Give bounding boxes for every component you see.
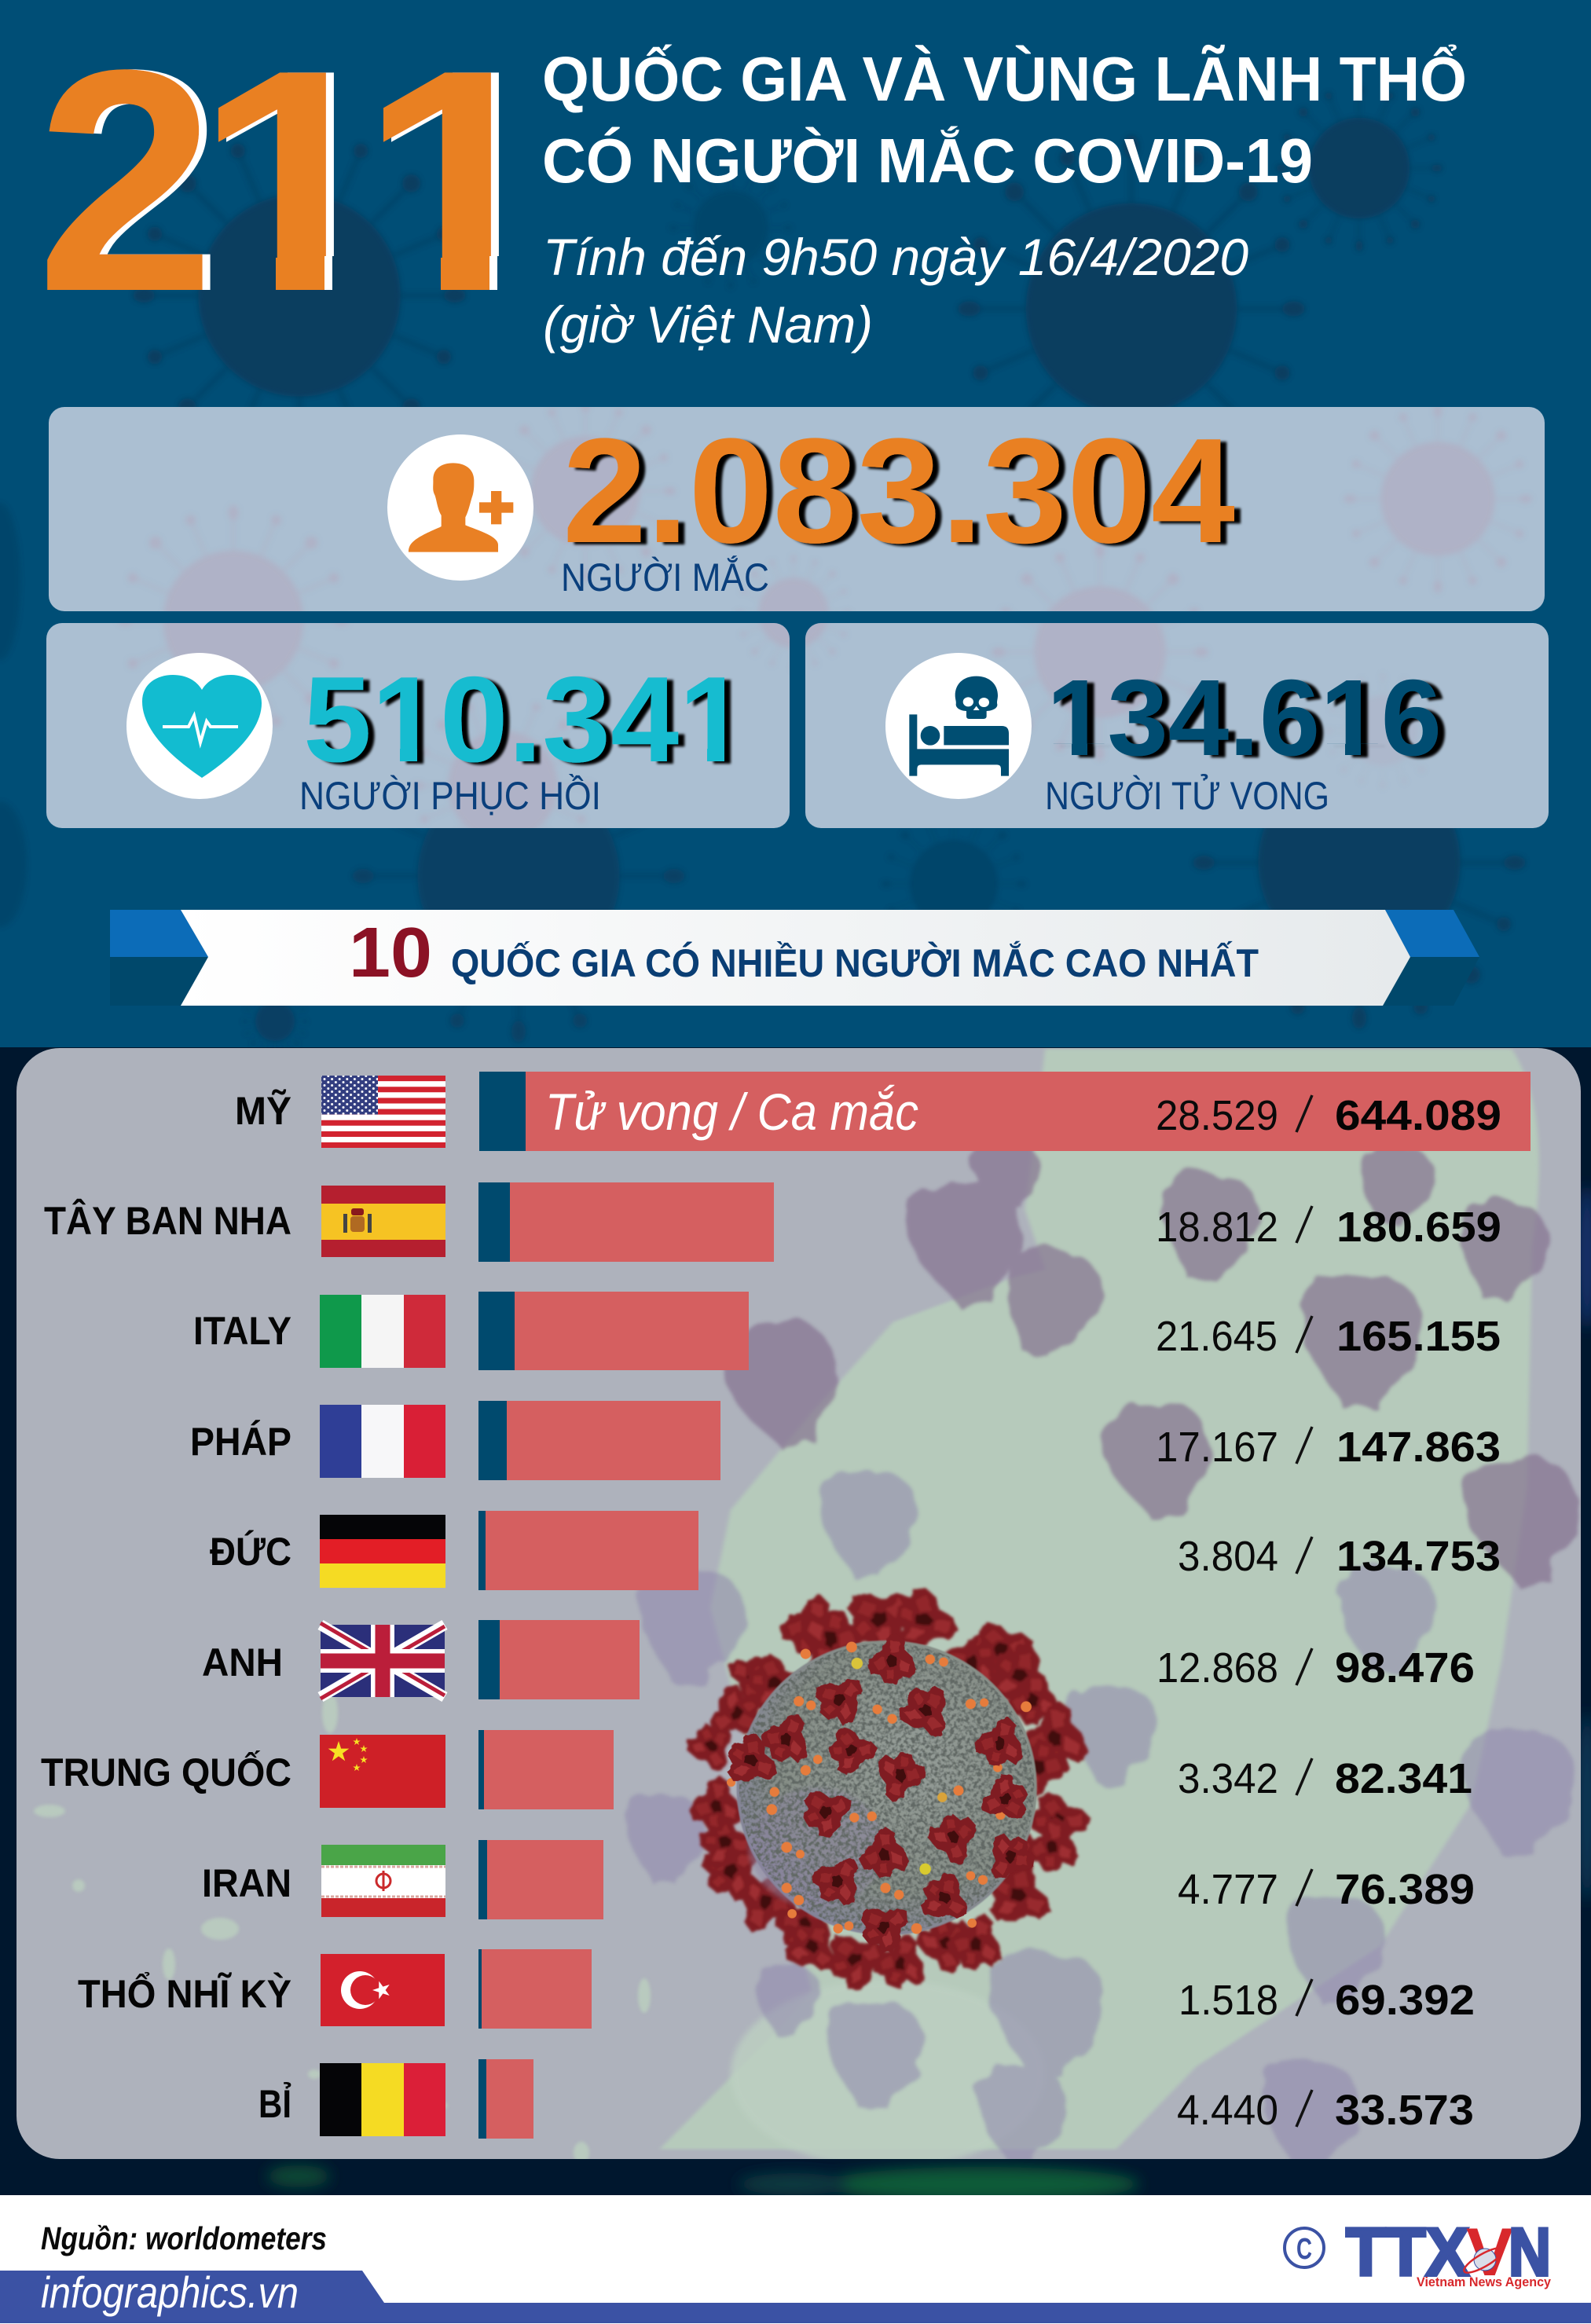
flag: Spain xyxy=(321,1186,445,1257)
row 10: Bỉ: 33.573 xyxy=(1335,2087,1474,2134)
row 5: Đức: 3.804 xyxy=(1178,1533,1278,1580)
section banner: 10 xyxy=(349,914,432,992)
row 3: Italy: ITALY xyxy=(193,1309,291,1353)
row 2: Tây Ban Nha: TÂY BAN NHA xyxy=(44,1199,291,1243)
subtitle: date: (giờ Việt Nam) xyxy=(543,295,873,354)
website: infographics.vn xyxy=(41,2267,299,2317)
icon: person plus xyxy=(387,434,533,581)
logo: copyright mark xyxy=(1285,2228,1324,2267)
row 4: Pháp: 147.863 xyxy=(1336,1424,1501,1471)
icon: heart xyxy=(126,653,273,799)
flag: USA xyxy=(321,1076,445,1148)
big number 211: 1 xyxy=(359,5,557,357)
row 3: Italy xyxy=(193,1292,1501,1370)
flag: Belgium xyxy=(320,2063,445,2136)
footer source text: Nguồn: worldometers xyxy=(41,2220,327,2256)
recovered label: NGƯỜI PHỤC HỒI xyxy=(299,774,601,818)
row 9: Thổ Nhĩ Kỳ xyxy=(78,1949,1475,2029)
big number 211: 2 xyxy=(36,5,215,357)
row 9: Thổ Nhĩ Kỳ: 1.518 xyxy=(1179,1977,1278,2024)
row 10: Bỉ xyxy=(258,2059,1474,2139)
flag: Turkey xyxy=(321,1954,445,2026)
background: dark lower section xyxy=(0,1047,1591,2196)
flag: Iran xyxy=(321,1845,445,1917)
panel: recovered xyxy=(46,623,790,828)
flag: China xyxy=(320,1735,445,1808)
panel: country chart xyxy=(16,1048,1591,2168)
section banner: QUỐC GIA CÓ NHIỀU NGƯỜI MẮC CAO NHẤT xyxy=(451,940,1259,985)
row 9: Thổ Nhĩ Kỳ: 69.392 xyxy=(1335,1977,1475,2024)
row 6: Anh: 12.868 xyxy=(1157,1644,1278,1692)
row 5: Đức xyxy=(210,1511,1501,1590)
logo: copyright mark: C xyxy=(1296,2233,1312,2266)
row 6: Anh xyxy=(202,1620,1475,1699)
row 7: Trung Quốc: 3.342 xyxy=(1178,1755,1278,1802)
row 10: Bỉ: 4.440 xyxy=(1177,2087,1278,2134)
row 1: Mỹ: MỸ xyxy=(235,1089,291,1133)
row 7: Trung Quốc: 82.341 xyxy=(1335,1755,1472,1802)
flag: Germany xyxy=(320,1515,445,1588)
row 1: Mỹ: 28.529 xyxy=(1156,1092,1278,1139)
title xyxy=(542,44,1467,196)
row 8: Iran: IRAN xyxy=(202,1861,291,1905)
logo: TTXVN: TTX xyxy=(1346,2215,1469,2290)
background: top blue section xyxy=(0,0,1591,1047)
row 1: Mỹ xyxy=(235,1072,1531,1151)
row 1: Mỹ: 644.089 xyxy=(1335,1092,1501,1139)
row 6: Anh: 98.476 xyxy=(1335,1644,1475,1692)
row 5: Đức: 134.753 xyxy=(1336,1533,1501,1580)
row 8: Iran: 4.777 xyxy=(1178,1866,1278,1913)
logo: TTXVN: N xyxy=(1509,2215,1551,2290)
row 2: Tây Ban Nha: 18.812 xyxy=(1156,1204,1278,1251)
row 4: Pháp: 17.167 xyxy=(1156,1424,1278,1471)
row 4: Pháp xyxy=(190,1401,1501,1480)
row 7: Trung Quốc: TRUNG QUỐC xyxy=(41,1750,291,1794)
deaths number: 134.616 xyxy=(1047,658,1442,779)
background: dark virus pattern top section xyxy=(0,85,1526,1054)
cases number: 2.083.304 xyxy=(563,408,1235,574)
background: pale virus pattern on cards xyxy=(121,407,1529,828)
row 7: Trung Quốc xyxy=(41,1730,1472,1809)
row 2: Tây Ban Nha: 180.659 xyxy=(1336,1204,1501,1251)
deaths label: NGƯỜI TỬ VONG xyxy=(1045,773,1329,818)
subtitle: date xyxy=(543,228,1248,354)
row 3: Italy: 165.155 xyxy=(1336,1313,1501,1360)
background: green virus glow at bottom strip xyxy=(267,1186,1591,2201)
flag: France xyxy=(320,1405,445,1478)
logo: TTXVN xyxy=(1346,2215,1552,2290)
row 8: Iran: 76.389 xyxy=(1335,1866,1475,1913)
row 9: Thổ Nhĩ Kỳ: THỔ NHĨ KỲ xyxy=(78,1971,291,2016)
section banner xyxy=(110,910,1479,1006)
row 8: Iran xyxy=(202,1840,1475,1919)
row 5: Đức: ĐỨC xyxy=(210,1530,291,1574)
row 3: Italy: 21.645 xyxy=(1156,1313,1278,1360)
footer ribbon xyxy=(0,2271,1591,2323)
flag: Italy xyxy=(320,1295,445,1368)
logo: TTXVN: V xyxy=(1466,2215,1513,2290)
logo: TTXVN: Vietnam News Agency xyxy=(1417,2275,1552,2289)
row 2: Tây Ban Nha xyxy=(44,1182,1501,1262)
subtitle: date: Tính đến 9h50 ngày 16/4/2020 xyxy=(543,228,1248,286)
panel: cases xyxy=(49,407,1545,611)
row 4: Pháp: PHÁP xyxy=(190,1420,291,1464)
central virus illustration xyxy=(680,1571,1096,1997)
flag: UK xyxy=(321,1623,445,1699)
recovered number: 510.341 xyxy=(303,651,747,787)
row 1: Mỹ: Tử vong / Ca mắc xyxy=(545,1083,918,1141)
footer background xyxy=(0,2195,1591,2324)
big number 211: 1 xyxy=(194,5,392,357)
panel: deaths xyxy=(805,623,1549,828)
cases label: NGƯỜI MẮC xyxy=(561,555,769,599)
row 6: Anh: ANH xyxy=(202,1640,283,1684)
title: QUỐC GIA VÀ VÙNG LÃNH THỔ xyxy=(542,44,1467,114)
row 10: Bỉ: BỈ xyxy=(258,2082,291,2126)
icon: skull and bed xyxy=(885,653,1032,799)
title: CÓ NGƯỜI MẮC COVID-19 xyxy=(542,126,1313,196)
big number 211 xyxy=(47,69,499,290)
